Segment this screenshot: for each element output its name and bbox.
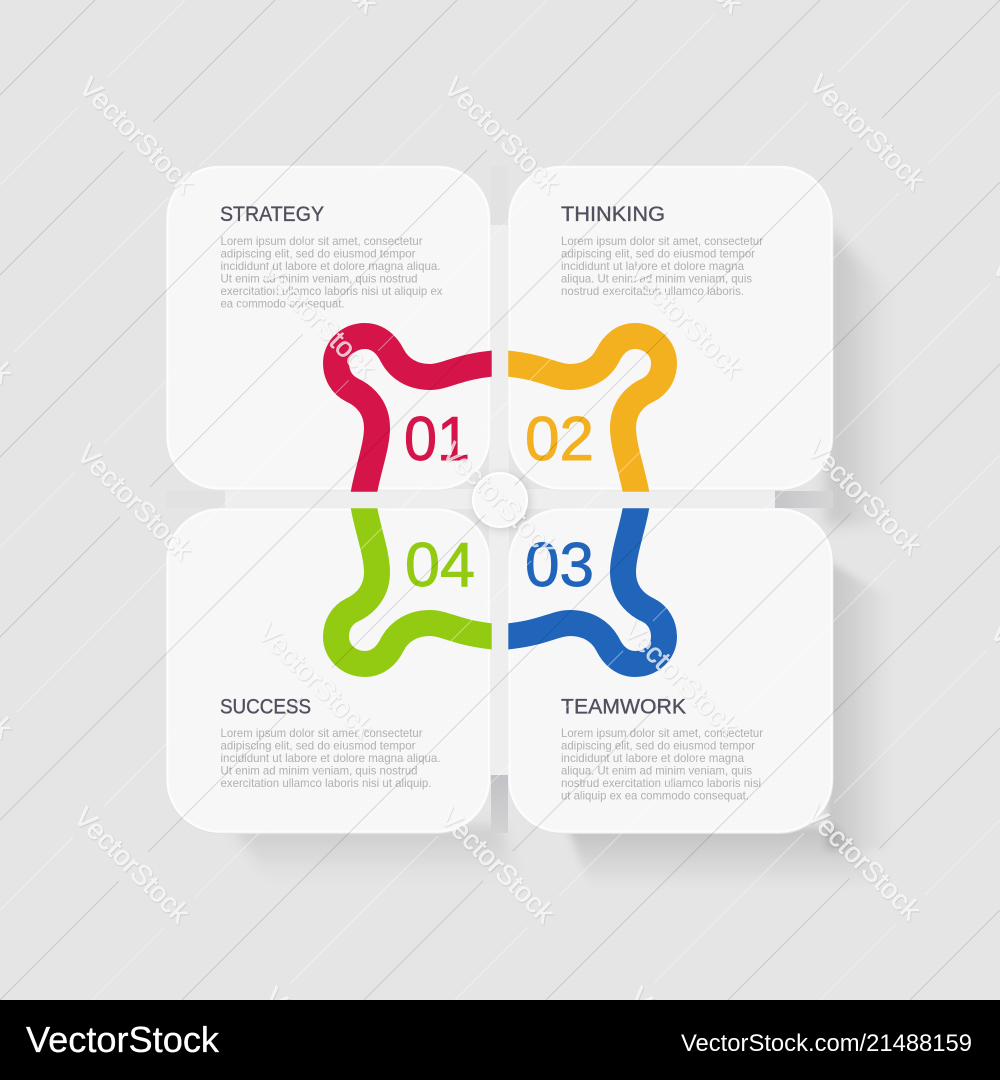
center circle: [473, 473, 531, 531]
text block: thinking: [561, 234, 763, 298]
text block: thinking: nostrud exercitation ullamco laboris.: [561, 284, 744, 298]
watermarks: VectorStock: [433, 801, 561, 929]
ribbon: green: [336, 494, 506, 664]
text block: teamwork: incididunt ut labore et dolore magna: [561, 751, 744, 765]
footer logo text: VectorStock: [26, 1019, 220, 1060]
heading: strategy: STRATEGY: [220, 203, 324, 226]
text block: success: Ut enim ad minim veniam, quis nostrud: [220, 764, 418, 778]
text block: strategy: [220, 234, 443, 310]
heading: thinking: THINKING: [561, 203, 665, 226]
text block: success: [220, 726, 440, 790]
watermarks: VectorStock: [803, 68, 931, 196]
number 04: 04: [405, 531, 475, 600]
text block: teamwork: nostrud exercitation ullamco laboris nisi: [561, 776, 761, 790]
text block: strategy: Lorem ipsum dolor sit amet, consectetur: [220, 234, 423, 248]
watermarks: VectorStock: [799, 798, 927, 926]
text block: thinking: aliqua. Ut enim ad minim veniam, quis: [561, 272, 752, 286]
heading: teamwork: TEAMWORK: [561, 696, 686, 718]
text block: teamwork: [561, 726, 763, 802]
text block: strategy: adipiscing elit, sed do eiusmod tempor: [220, 246, 416, 260]
watermarks: VectorStock: [254, 256, 382, 384]
panel: thinking: [508, 166, 834, 490]
heading: success: SUCCESS: [220, 696, 311, 718]
text block: teamwork: adipiscing elit, sed do eiusmod tempor: [561, 738, 755, 752]
panel: success: [166, 508, 490, 834]
text block: thinking: Lorem ipsum dolor sit amet, consectetur: [561, 234, 763, 248]
number 03: 03: [525, 531, 594, 600]
watermarks: VectorStock: [68, 801, 196, 929]
footer bar: [0, 1000, 1000, 1080]
text block: teamwork: ut aliquip ex ea commodo consequat.: [561, 788, 749, 802]
watermarks: VectorStock: [800, 433, 928, 561]
text block: thinking: incididunt ut labore et dolore magna: [561, 259, 744, 273]
text block: strategy: ea commodo consequat.: [220, 296, 344, 310]
watermarks: VectorStock: [73, 71, 201, 199]
text block: success: adipiscing elit, sed do eiusmod tempor: [220, 738, 416, 752]
ribbon: blue: [494, 494, 664, 664]
text block: success: Lorem ipsum dolor sit amet, consectetur: [220, 726, 423, 740]
watermarks: VectorStock: [621, 256, 749, 384]
footer url text: VectorStock.com/21488159: [681, 1031, 972, 1057]
number 01: 01: [404, 405, 470, 474]
card shadows: [232, 225, 900, 892]
watermarks: VectorStock: [251, 616, 379, 744]
text block: thinking: adipiscing elit, sed do eiusmod tempor: [561, 246, 755, 260]
panel: teamwork: [508, 508, 834, 834]
watermarks: VectorStock: [436, 436, 564, 564]
ribbon: yellow: [494, 336, 664, 506]
text block: success: exercitation ullamco laboris nisi ut aliquip.: [220, 776, 432, 790]
panel: strategy: [166, 166, 490, 490]
text block: teamwork: aliqua. Ut enim ad minim veniam, quis: [561, 764, 752, 778]
text block: teamwork: Lorem ipsum dolor sit amet, consectetur: [561, 726, 763, 740]
watermarks: VectorStock: [438, 71, 566, 199]
watermarks: VectorStock: [616, 614, 744, 742]
ribbon: red: [336, 336, 506, 506]
base cross behind the cards: [166, 166, 833, 833]
number 02: 02: [525, 405, 594, 474]
text block: strategy: Ut enim ad minim veniam, quis nostrud: [220, 272, 418, 286]
watermarks: VectorStock: [71, 438, 199, 566]
text block: strategy: exercitation ullamco laboris nisi ut aliquip ex: [220, 284, 443, 298]
text block: strategy: incididunt ut labore et dolore magna aliqua.: [220, 259, 440, 273]
text block: success: incididunt ut labore et dolore magna aliqua.: [220, 751, 440, 765]
